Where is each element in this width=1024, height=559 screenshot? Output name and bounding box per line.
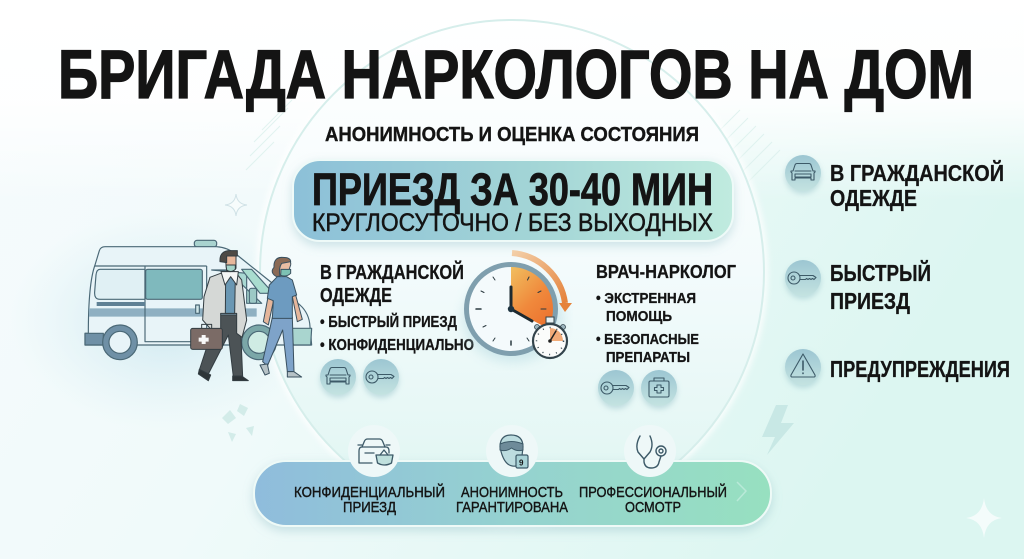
icon: key: [363, 359, 399, 395]
panel: bottom benefits bar: [254, 425, 771, 526]
decorative lightning bolt: [762, 405, 794, 455]
feature: warnings: [785, 349, 1010, 385]
bullet continuation: ПОМОЩЬ: [606, 309, 672, 325]
arrival time: ПРИЕЗД ЗА 30-40 МИН: [312, 164, 713, 215]
subtitle: АНОНИМНОСТЬ И ОЦЕНКА СОСТОЯНИЯ: [325, 123, 699, 146]
decorative glow behind ambulance: [10, 210, 320, 430]
item: anonymity guaranteed: 9: [519, 458, 524, 468]
item: anonymity guaranteed: ГАРАНТИРОВАНА: [456, 500, 568, 516]
panel: right column features: [785, 155, 1010, 385]
bullet continuation: ПРЕПАРАТЫ: [606, 350, 690, 366]
item: professional examination: [579, 425, 727, 516]
central circle: [260, 20, 764, 524]
chevron: [737, 482, 746, 501]
feature: fast arrival: БЫСТРЫЙ: [830, 259, 931, 286]
heading second line: ОДЕЖДЕ: [320, 285, 392, 307]
decorative sparkle bottom right: [966, 498, 1002, 538]
decorative diamonds lower left: [222, 404, 254, 442]
panel: arrival time banner: [293, 160, 733, 241]
feature: plain clothes: [785, 155, 1004, 211]
bullet: safe drugs: • БЕЗОПАСНЫЕ: [596, 332, 699, 348]
panel: plain clothes: [320, 260, 474, 395]
item: professional examination: ПРОФЕССИОНАЛЬНЫЙ: [579, 483, 727, 501]
feature: plain clothes: ОДЕЖДЕ: [830, 185, 917, 211]
doctor: [191, 251, 248, 381]
feature: fast arrival: ПРИЕЗД: [830, 288, 910, 314]
schedule: КРУГЛОСУТОЧНО / БЕЗ ВЫХОДНЫХ: [312, 209, 713, 237]
stopwatch: [533, 317, 567, 358]
item: confidential arrival: ПРИЕЗД: [343, 500, 396, 516]
item: professional examination: ОСМОТР: [625, 500, 681, 516]
icon: key: [598, 370, 634, 406]
bullet: confidential: • КОНФИДЕНЦИАЛЬНО: [320, 337, 474, 354]
item: anonymity guaranteed: АНОНИМНОСТЬ: [461, 485, 563, 501]
heading: ВРАЧ-НАРКОЛОГ: [596, 261, 736, 282]
icon: first aid kit: [641, 370, 677, 406]
feature: fast arrival: [785, 259, 931, 314]
bullet: emergency help: • ЭКСТРЕННАЯ: [596, 291, 696, 307]
item: confidential arrival: КОНФИДЕНЦИАЛЬНЫЙ: [294, 483, 445, 501]
illustration: ambulance with medics: [85, 240, 312, 381]
clock with stopwatch: [463, 253, 572, 362]
orange time wedge: [511, 266, 554, 329]
ambulance: [85, 240, 312, 360]
nurse: [260, 257, 302, 377]
icon: car: [320, 359, 356, 395]
item: anonymity guaranteed: [456, 425, 568, 516]
clock hands: [511, 287, 532, 321]
decorative hatching around the circle: [246, 100, 780, 190]
panel: narcologist doctor: [596, 261, 736, 406]
decorative sparkle left: [225, 194, 247, 216]
arrow: [512, 253, 565, 303]
bullet: fast arrival: • БЫСТРЫЙ ПРИЕЗД: [320, 312, 457, 331]
heading: В ГРАЖДАНСКОЙ: [320, 260, 464, 284]
item: confidential arrival: [294, 425, 445, 516]
